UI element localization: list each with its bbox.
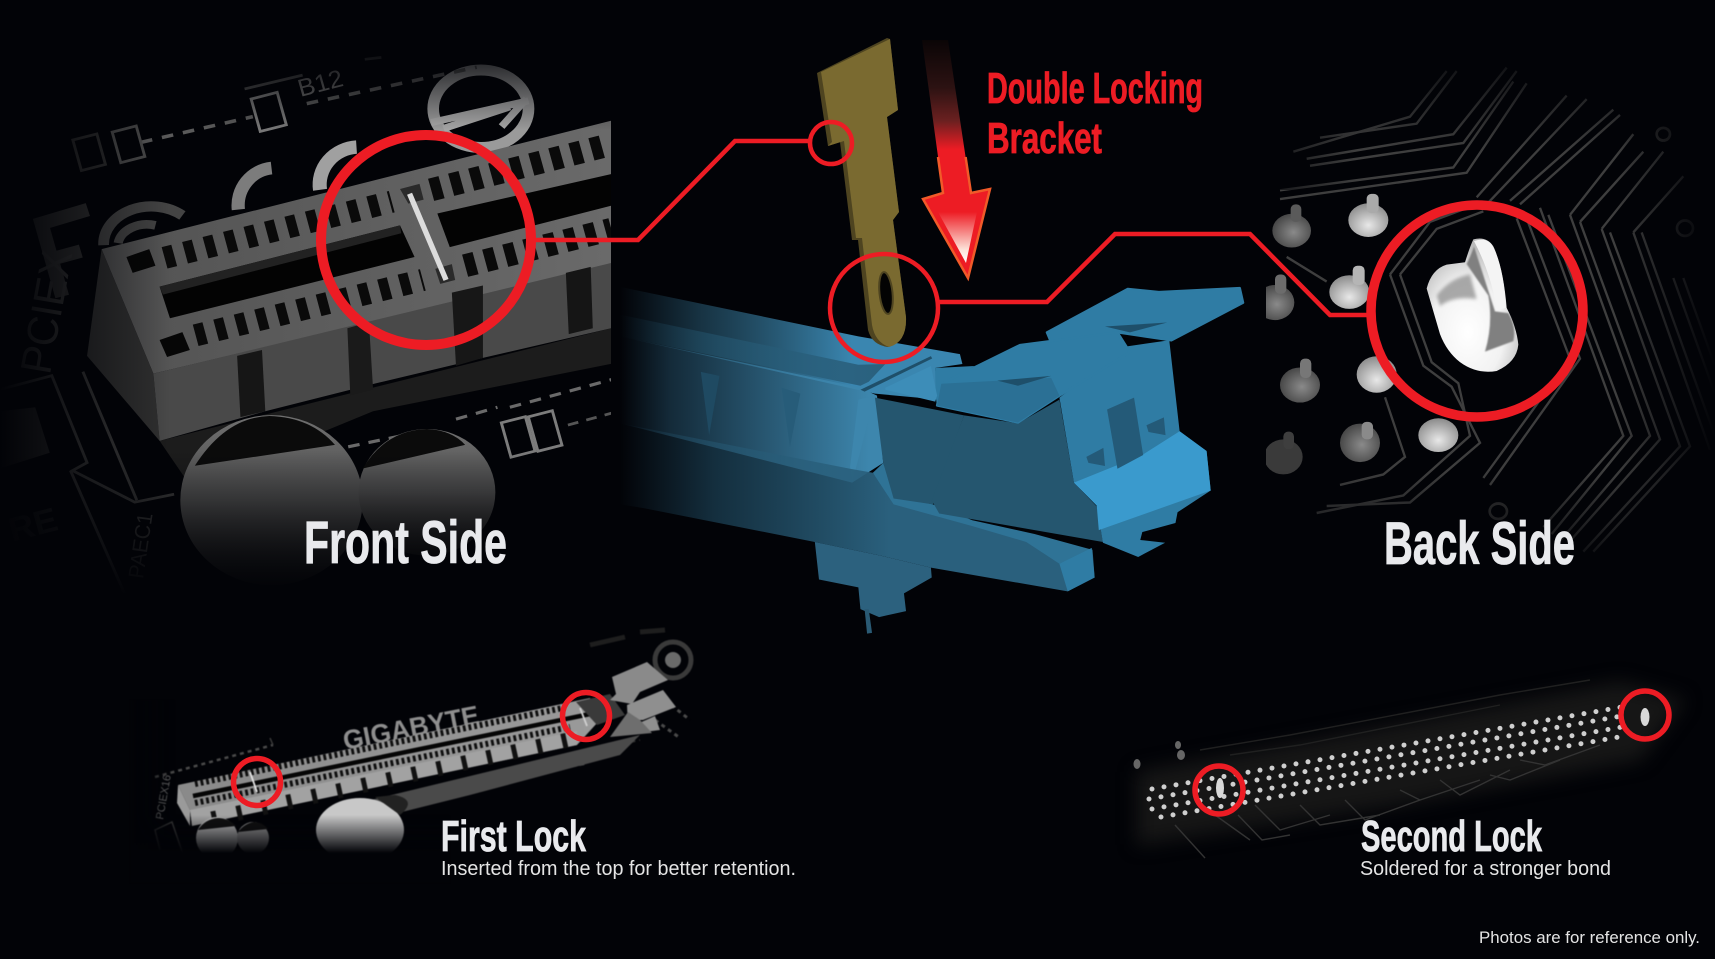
text block: second lock [1360, 812, 1611, 880]
trace lines below pins [1175, 680, 1600, 858]
PCB silkscreen markings: RE [4, 501, 62, 549]
GIGABYTE logo text: GIGABYTE [340, 700, 482, 756]
red circle: back side [1371, 205, 1583, 417]
panel: second lock photo [1134, 680, 1685, 858]
stray pads [1134, 741, 1185, 769]
rail lower body [620, 423, 1095, 591]
front latch [937, 322, 1167, 423]
red callout line: front side to bracket hook [533, 141, 810, 240]
panel: first lock photo [130, 630, 691, 883]
slot latches [610, 662, 676, 737]
solder joints [1216, 708, 1650, 798]
red circle: second lock left [1195, 766, 1243, 814]
text block: second lock: Soldered for a stronger bond [1360, 858, 1611, 880]
red circle: bracket tail [830, 254, 938, 362]
arrow: insertion direction [922, 40, 990, 278]
red circle: second lock right [1621, 691, 1669, 739]
circuit traces [1280, 68, 1715, 552]
panel: back side photo [1266, 67, 1701, 552]
vias [1490, 128, 1693, 519]
rail top [620, 287, 962, 400]
text block: first lock: Inserted from the top for better retention. [441, 858, 796, 880]
bottom leg [815, 542, 932, 617]
solder pin rows [1149, 706, 1628, 817]
middle block [875, 398, 964, 504]
board background [154, 630, 691, 860]
heading: double locking bracket: Double Locking [987, 64, 1203, 113]
rail side face [620, 336, 883, 483]
capacitors [180, 415, 496, 562]
front block [1059, 340, 1211, 591]
heading: front side: Front Side [304, 509, 507, 576]
rear latch [1047, 288, 1243, 342]
text block: first lock [441, 812, 796, 880]
red callout line: bracket tail to back side [939, 234, 1372, 315]
heading: double locking bracket [987, 64, 1203, 163]
gold locking bracket [817, 38, 906, 347]
PCB silkscreen markings [0, 57, 611, 593]
long slot [177, 694, 640, 826]
PCB silkscreen markings: PAEC1 [125, 512, 158, 580]
PCB silkscreen markings: PCIEX [11, 247, 82, 377]
heading: double locking bracket: Bracket [987, 114, 1102, 163]
text block: second lock: Second Lock [1361, 812, 1542, 861]
red circle: front side [321, 135, 531, 345]
footnote: Photos are for reference only. [1479, 929, 1700, 947]
side wall [932, 400, 1103, 542]
solder joint close-up [1427, 239, 1518, 372]
PCIe slot connector [87, 121, 611, 486]
red circle: first lock left [234, 758, 280, 806]
solder pads [1256, 194, 1458, 474]
board background: PCIEX16 [154, 774, 174, 821]
panel: blue slot latch 3D model [620, 287, 1243, 634]
board glow [1137, 682, 1685, 845]
red circle: bracket hook [810, 122, 852, 164]
panel: front side photo [0, 0, 611, 620]
solder pin [865, 609, 872, 634]
red circle: first lock right [562, 692, 610, 740]
capacitors [196, 795, 408, 862]
text block: first lock: First Lock [441, 812, 586, 861]
PCB silkscreen markings: B12 [295, 65, 346, 103]
heading: back side: Back Side [1384, 510, 1575, 577]
